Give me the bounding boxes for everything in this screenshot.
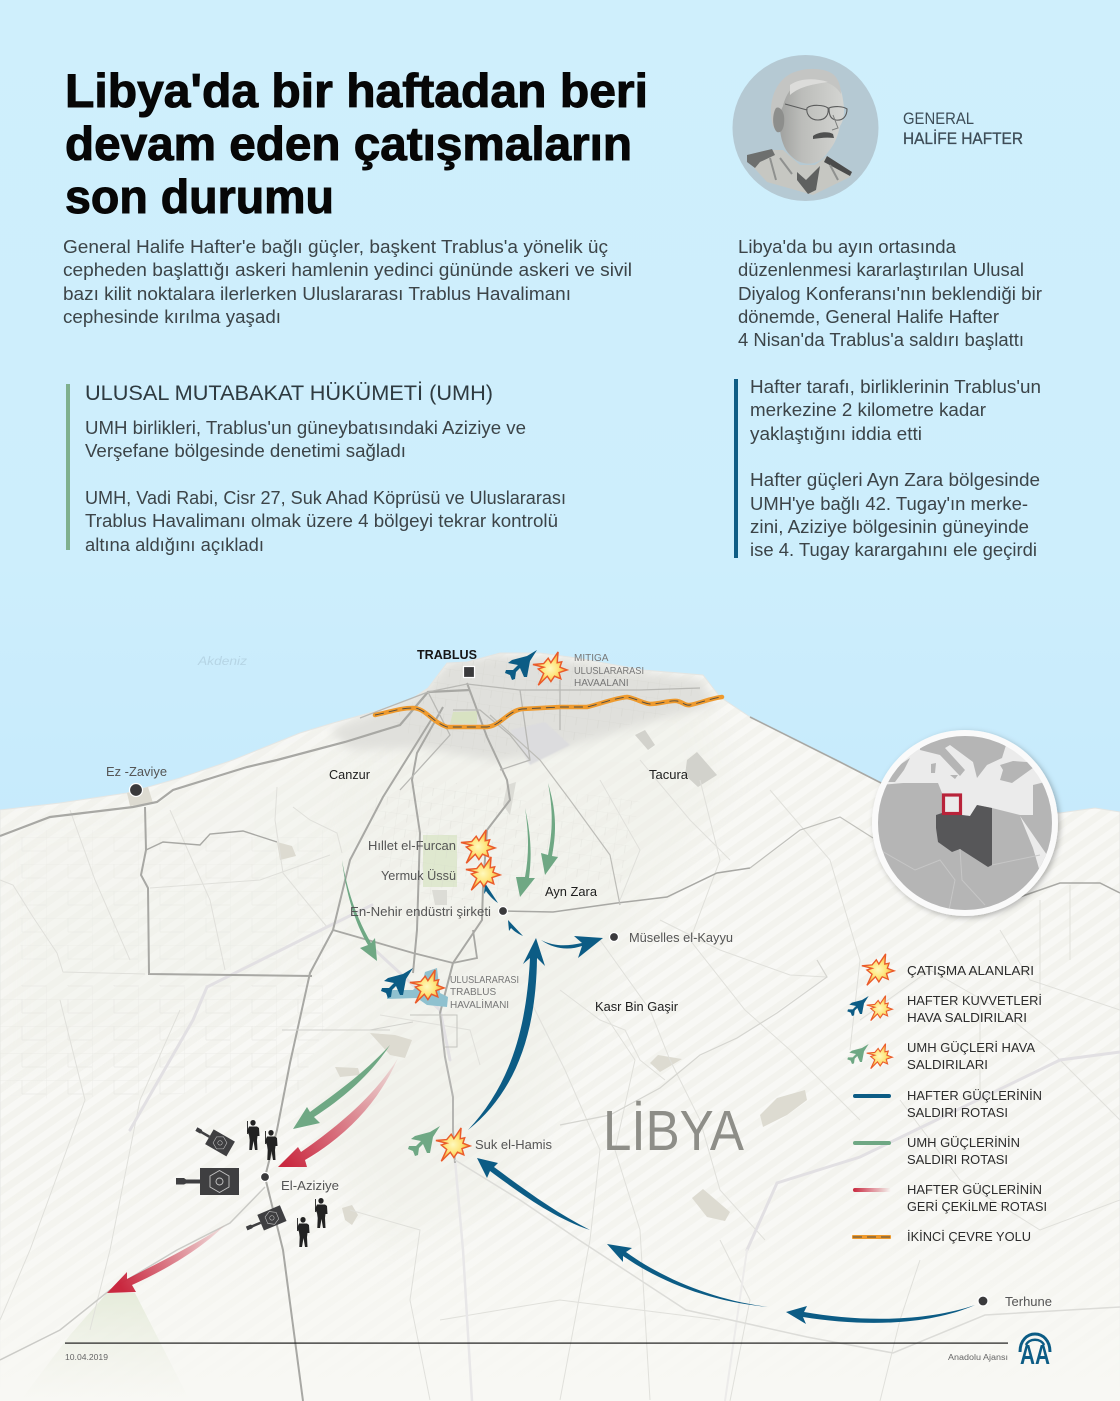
legend item: UMH air strikes <box>847 1040 1035 1072</box>
map: place labels: Tacura <box>649 767 689 782</box>
map: place labels: Suk el-Hamis <box>475 1137 552 1152</box>
legend item: UMH air strikes: SALDIRILARI <box>907 1057 988 1072</box>
locator globe <box>870 730 1060 920</box>
legend item: Hafter attack route: SALDIRI ROTASI <box>907 1105 1008 1120</box>
panel: UMH: Trablus Havalimanı olmak üzere 4 bölgeyi tekrar kontrolü <box>85 511 558 531</box>
panel: Hafter claims: Hafter güçleri Ayn Zara bölgesinde <box>750 470 1040 490</box>
map: place labels: Yermuk Üssü <box>381 868 456 883</box>
legend item: clashes: ÇATIŞMA ALANLARI <box>907 963 1034 978</box>
panel: Hafter claims: zini, Aziziye bölgesinin güneyinde <box>750 517 1029 537</box>
map: place labels: ULUSLARARASI <box>450 975 519 986</box>
context text: Diyalog Konferansı'nın beklendiği bir <box>738 284 1042 304</box>
map: place labels: Müselles el-Kayyu <box>629 930 733 945</box>
map: land base <box>0 653 1120 1401</box>
portrait caption: GENERAL <box>903 109 974 128</box>
portrait caption: HALİFE HAFTER <box>903 129 1023 148</box>
icons: tanks <box>176 1122 287 1236</box>
map: place labels: ULUSLARARASI <box>574 666 644 677</box>
intro text: General Halife Hafter'e bağlı güçler, başkent Trablus'a yönelik üç <box>63 237 608 257</box>
map: place labels: Kasr Bin Gaşir <box>595 999 679 1014</box>
intro text: cephesinde kırılma yaşadı <box>63 307 281 327</box>
logo: Anadolu Ajansi <box>1020 1334 1050 1370</box>
map: place labels: HAVAALANI <box>574 678 629 689</box>
context text: düzenlenmesi kararlaştırılan Ulusal <box>738 260 1024 280</box>
context text: Libya'da bu ayın ortasında <box>738 237 957 257</box>
panel: Hafter claims <box>734 377 1041 560</box>
legend item: UMH attack route: SALDIRI ROTASI <box>907 1152 1008 1167</box>
title <box>65 64 648 223</box>
panel: UMH: UMH birlikleri, Trablus'un güneybatısındaki Aziziye ve <box>85 418 526 438</box>
panel: UMH <box>66 382 566 555</box>
map: place labels: LİBYA <box>603 1099 744 1163</box>
legend item: UMH attack route: UMH GÜÇLERİNİN <box>907 1135 1020 1150</box>
legend item: Hafter air strikes: HAFTER KUVVETLERİ <box>907 993 1042 1008</box>
map: place labels: Terhune <box>1005 1294 1052 1309</box>
map: place labels: Canzur <box>329 767 371 782</box>
title: son durumu <box>65 170 334 223</box>
map: place labels: Hıllet el-Furcan <box>368 838 456 853</box>
legend item: clashes <box>862 954 1034 985</box>
map: place labels: HAVALİMANI <box>450 998 509 1011</box>
map: second ring road <box>375 697 722 727</box>
intro text <box>63 237 632 327</box>
panel: Hafter claims: ise 4. Tugay karargahını ele geçirdi <box>750 540 1037 560</box>
legend <box>847 954 1047 1244</box>
portrait caption <box>903 109 1023 148</box>
map: place labels <box>106 647 1052 1309</box>
map: place labels: Akdeniz <box>197 654 247 668</box>
map: place labels: MITIGA <box>574 653 609 664</box>
legend item: Hafter air strikes <box>847 993 1042 1025</box>
legend item: Hafter attack route: HAFTER GÜÇLERİNİN <box>907 1088 1042 1103</box>
map: place markers <box>130 666 988 1306</box>
map: place labels: En-Nehir endüstri şirketi <box>350 904 491 919</box>
map: place labels: TRABLUS <box>450 987 496 998</box>
logo: Anadolu Ajansi: AA <box>1020 1339 1050 1370</box>
legend item: Hafter withdrawal route <box>853 1182 1047 1214</box>
legend item: second ring road <box>852 1229 1031 1244</box>
footer: Anadolu Ajansı <box>948 1353 1008 1362</box>
map: place labels: El-Aziziye <box>281 1178 339 1193</box>
legend item: Hafter withdrawal route: HAFTER GÜÇLERİNİN <box>907 1182 1042 1197</box>
icons: soldiers <box>247 1120 328 1247</box>
icons: air strikes and clashes <box>381 650 567 1161</box>
title: Libya'da bir haftadan beri <box>65 64 648 117</box>
legend item: UMH attack route <box>853 1135 1020 1167</box>
panel: Hafter claims: UMH'ye bağlı 42. Tugay'ın merke- <box>750 494 1028 514</box>
legend item: Hafter air strikes: HAVA SALDIRILARI <box>907 1010 1027 1025</box>
map: place labels: Ez -Zaviye <box>106 764 167 779</box>
context text: dönemde, General Halife Hafter <box>738 307 999 327</box>
legend item: second ring road: İKİNCİ ÇEVRE YOLU <box>907 1229 1031 1244</box>
panel: UMH: Verşefane bölgesinde denetimi sağladı <box>85 441 406 461</box>
legend item: UMH air strikes: UMH GÜÇLERİ HAVA <box>907 1040 1035 1055</box>
context text: 4 Nisan'da Trablus'a saldırı başlattı <box>738 330 1024 350</box>
arrows: UMH attack routes <box>293 783 558 1129</box>
map: place labels: TRABLUS <box>417 647 477 662</box>
panel: Hafter claims: Hafter tarafı, birliklerinin Trablus'un <box>750 377 1041 397</box>
map: place labels: Ayn Zara <box>545 884 598 899</box>
map: main roads <box>0 680 1120 1401</box>
context text <box>738 237 1042 350</box>
legend item: Hafter withdrawal route: GERİ ÇEKİLME ROTASI <box>907 1199 1047 1214</box>
panel: UMH: altına aldığını açıkladı <box>85 535 264 555</box>
panel: UMH: UMH, Vadi Rabi, Cisr 27, Suk Ahad Köprüsü ve Uluslararası <box>85 488 566 508</box>
arrows: Hafter attack routes <box>468 883 975 1324</box>
title: devam eden çatışmaların <box>65 117 632 170</box>
portrait: General Halife Hafter <box>732 55 878 201</box>
panel: Hafter claims: merkezine 2 kilometre kadar <box>750 400 986 420</box>
intro text: cepheden başlattığı askeri hamlenin yedinci gününde askeri ve sivil <box>63 260 632 280</box>
map: pale motorways <box>130 905 1120 1401</box>
panel: Hafter claims: yaklaştığını iddia etti <box>750 424 922 444</box>
map: minor roads <box>0 760 1120 1401</box>
map: tan settlement patches <box>127 730 807 1225</box>
legend item: Hafter attack route <box>853 1088 1042 1120</box>
airport area: Trablus <box>387 968 448 1007</box>
arrows: Hafter withdrawal routes <box>107 1058 398 1293</box>
intro text: bazı kilit noktalara ilerlerken Uluslararası Trablus Havalimanı <box>63 284 571 304</box>
footer: 10.04.2019 <box>65 1353 109 1362</box>
panel: UMH: ULUSAL MUTABAKAT HÜKÜMETİ (UMH) <box>85 382 493 405</box>
footer <box>65 1342 1008 1362</box>
